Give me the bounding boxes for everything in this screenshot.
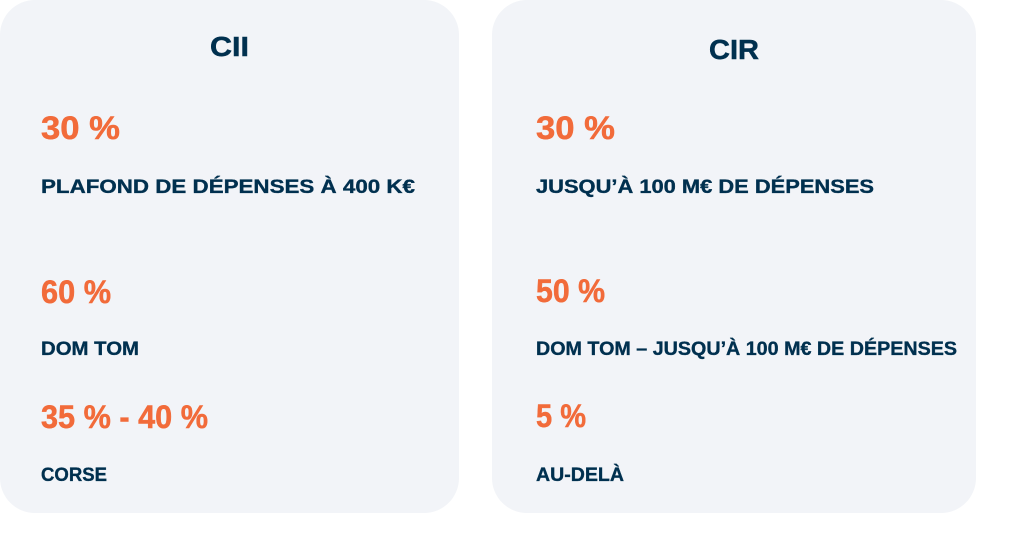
label: plafond: PLAFOND DE DÉPENSES À 400 K€ xyxy=(41,176,416,198)
panel: CII xyxy=(0,0,459,513)
label: DOM TOM: DOM TOM xyxy=(41,339,139,360)
label: Corse: CORSE xyxy=(41,465,107,486)
label: au-delà: AU-DELÀ xyxy=(536,464,624,486)
rate: 30 %: 30 % xyxy=(536,110,615,146)
rate: 60 %: 60 % xyxy=(41,274,111,310)
rate: 5 %: 5 % xyxy=(536,398,586,434)
panel: CIR xyxy=(492,0,976,513)
label: DOM TOM jusqu'à 100 M€: DOM TOM – JUSQU’À 100 M€ DE DÉPENSES xyxy=(536,338,957,360)
label: jusqu'à 100 M€: JUSQU’À 100 M€ DE DÉPENSES xyxy=(536,176,874,198)
rate: 50 %: 50 % xyxy=(536,273,605,309)
rate: 35 % - 40 %: 35 % - 40 % xyxy=(41,399,208,435)
heading: CIR: CIR xyxy=(709,34,759,65)
rate: 30 %: 30 % xyxy=(41,110,120,146)
heading: CII: CII xyxy=(210,31,249,62)
